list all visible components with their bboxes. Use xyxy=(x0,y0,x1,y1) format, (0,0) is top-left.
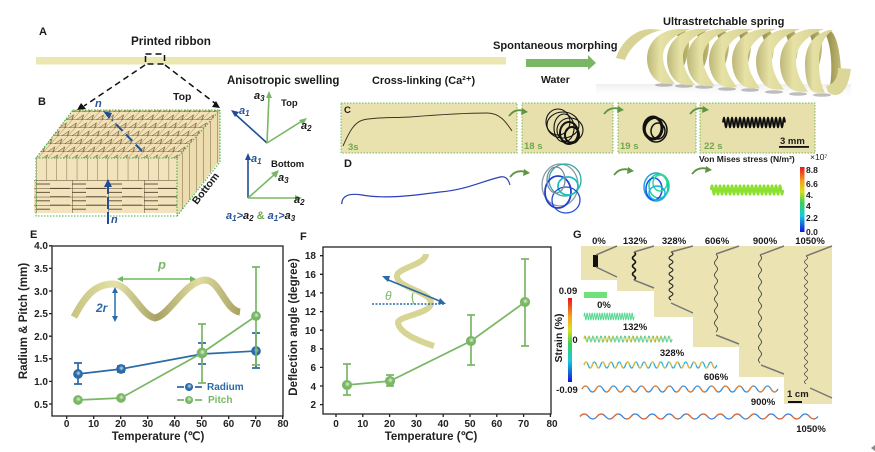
chart F x tick labels xyxy=(333,419,558,430)
strain colour bar: Strain (%) xyxy=(553,313,565,363)
scale bar: 1 cm: 1 cm xyxy=(787,389,809,400)
panel B: layered block diagram xyxy=(34,98,222,226)
chart E frame and ticks xyxy=(49,246,283,419)
printed ribbon strip xyxy=(36,57,506,64)
chart F y tick labels: 16 xyxy=(305,270,316,281)
strain colour bar: 0 xyxy=(572,335,578,346)
swelling axes, bottom xyxy=(245,153,305,207)
formula: a1 greater than a2 and a3: a xyxy=(226,210,232,222)
chart F frame and ticks xyxy=(320,247,551,417)
chart F x axis title: Temperature (℃) xyxy=(385,430,477,443)
strain colour bar xyxy=(553,286,578,396)
chart E x tick labels: 30 xyxy=(142,419,154,430)
chart E y tick labels: 3.0 xyxy=(34,287,48,298)
chart F y tick labels xyxy=(305,251,316,411)
colour bar: von Mises stress: 4. xyxy=(806,190,813,200)
swelling axes, top: a xyxy=(239,105,245,117)
photo 0% xyxy=(581,246,617,280)
colour bar: von Mises stress: 6.6 xyxy=(806,179,818,189)
spring at 1050% xyxy=(580,414,826,435)
illustration: ultrastretchable spring xyxy=(596,29,851,100)
chart F x tick labels: 10 xyxy=(357,419,369,430)
chart E x tick labels: 60 xyxy=(223,419,235,430)
panel label D: D xyxy=(344,158,352,170)
chart F x tick labels: 20 xyxy=(384,419,396,430)
chart E x tick labels: 20 xyxy=(115,419,127,430)
photo 328% xyxy=(654,246,693,317)
formula: a1 greater than a2 and a3: 1 xyxy=(274,214,279,223)
panel G: stretch photographs xyxy=(581,236,832,404)
chart E y tick labels: 1.0 xyxy=(34,377,48,388)
photo 1050% xyxy=(784,246,832,404)
formula: a1 greater than a2 and a3: a xyxy=(268,210,274,222)
spring at 900% xyxy=(582,386,778,408)
spring coils xyxy=(647,29,841,93)
deflection series xyxy=(343,259,529,395)
chart F y axis title: Deflection angle (degree) xyxy=(288,258,300,396)
label: cross-linking: Cross-linking (Ca²⁺) xyxy=(372,75,476,87)
photo 606% xyxy=(693,246,739,347)
formula: a1 greater than a2 and a3: 2 xyxy=(248,214,254,223)
spring at 606% xyxy=(584,362,729,383)
curved progress arrows, row C xyxy=(509,106,709,116)
strain colour bar: -0.09 xyxy=(556,385,578,396)
formula: a1 greater than a2 and a3: & xyxy=(254,210,268,222)
spring end tail xyxy=(826,68,851,95)
label n top: n xyxy=(95,98,102,110)
panel label E: E xyxy=(30,229,37,241)
legend xyxy=(177,382,244,406)
chart F y tick labels: 2 xyxy=(310,400,316,411)
chart E y tick labels: 1.5 xyxy=(34,354,48,365)
spring at 1050%: 1050% xyxy=(796,424,826,435)
stretch labels above photos: 132% xyxy=(623,236,648,247)
chart F: deflection angle vs temperature xyxy=(288,247,558,443)
helix illustration with p and 2r xyxy=(74,257,240,322)
spring at 132%: 132% xyxy=(623,322,648,333)
chart E: radius and pitch vs temperature xyxy=(18,241,289,443)
spring at 132% xyxy=(584,313,648,333)
stretch labels above photos: 900% xyxy=(753,236,778,247)
block top face xyxy=(36,110,220,158)
swelling axes, top: 2 xyxy=(306,124,312,133)
simulation: coiling 2 xyxy=(644,173,669,201)
arrow: water morphing xyxy=(526,55,596,70)
chart F y tick labels: 6 xyxy=(310,363,316,374)
label: von Mises stress: Von Mises stress (N/m²) xyxy=(699,154,795,164)
legend: Pitch xyxy=(208,395,232,406)
chart E x tick labels: 80 xyxy=(277,419,289,430)
colour bar: von Mises stress: 4 xyxy=(806,201,811,211)
chart F x tick labels: 50 xyxy=(464,419,476,430)
small corner marker xyxy=(871,445,875,451)
formula: a1 greater than a2 and a3: > xyxy=(278,210,285,222)
chart E y tick labels: 4.0 xyxy=(34,241,48,252)
block front lower layers xyxy=(34,180,177,213)
spring at 900%: 900% xyxy=(751,397,776,408)
heading: ultrastretchable spring: Ultrastretchable spring xyxy=(663,16,785,28)
stretch labels above photos: 1050% xyxy=(795,236,825,247)
formula: a1 greater than a2 and a3: 3 xyxy=(291,214,296,223)
swelling axes, top: 3 xyxy=(260,94,265,103)
panel label A: A xyxy=(39,26,47,38)
spring at 328% xyxy=(584,336,685,359)
chart E y tick labels xyxy=(34,241,48,411)
swelling axes, top: a xyxy=(254,90,260,102)
label n bottom: n xyxy=(111,214,118,226)
chart F y tick labels: 10 xyxy=(305,326,316,337)
normal vector, top xyxy=(103,111,142,151)
photo: 19 s coils: 19 s xyxy=(620,141,638,152)
photo 900% xyxy=(739,246,784,377)
chart F x tick labels: 40 xyxy=(438,419,449,430)
photo 132% xyxy=(617,246,654,291)
helix illustration with p and 2r: p xyxy=(157,257,166,272)
colour bar: von Mises stress: 0.0 xyxy=(806,227,818,237)
pitch series xyxy=(74,267,260,404)
chart F x tick labels: 70 xyxy=(518,419,530,430)
dashed zoom box with guide arrows xyxy=(77,54,220,110)
swelling axes, bottom: 3 xyxy=(284,176,289,185)
vertical helix with deflection angle: θ xyxy=(385,289,392,303)
colour bar: von Mises stress xyxy=(800,165,818,237)
heading: anisotropic swelling: Anisotropic swelling xyxy=(227,75,339,87)
colour bar: von Mises stress: 8.8 xyxy=(806,165,818,175)
swelling axes, top: a xyxy=(301,120,307,132)
photo: 22 s spring: 22 s xyxy=(704,141,722,152)
helix illustration with p and 2r: 2r xyxy=(95,301,109,315)
label: spontaneous morphing: Spontaneous morphing xyxy=(493,40,618,52)
chart F x tick labels: 0 xyxy=(333,419,339,430)
photo: 19 s coils xyxy=(618,103,696,153)
chart F y tick labels: 4 xyxy=(310,382,316,393)
spring floor shadow xyxy=(596,84,851,100)
swelling axes, bottom: 2 xyxy=(299,198,305,207)
chart E y axis title: Radium & Pitch (mm) xyxy=(18,263,30,379)
chart E y tick labels: 0.5 xyxy=(34,400,48,411)
simulated strain springs xyxy=(580,292,826,435)
formula: a1 greater than a2 and a3: a xyxy=(285,210,291,222)
curved progress arrows, row D xyxy=(510,166,712,177)
block front upper layer xyxy=(36,158,177,180)
label: multiplier: ×10⁷ xyxy=(810,152,828,162)
swelling axes, bottom: a xyxy=(294,194,300,206)
swelling axes, bottom: a xyxy=(251,153,257,165)
chart E x tick labels: 50 xyxy=(196,419,208,430)
formula: a1 greater than a2 and a3: a xyxy=(243,210,249,222)
spring contact shadows xyxy=(655,83,831,97)
chart F y tick labels: 12 xyxy=(305,307,316,318)
block side face xyxy=(177,110,220,216)
panel label F: F xyxy=(300,231,307,243)
spring at 328%: 328% xyxy=(660,348,685,359)
panel label G: G xyxy=(573,229,582,241)
swelling axes, top: 1 xyxy=(245,109,250,118)
simulation: coiling 1 xyxy=(542,164,581,213)
chart F x tick labels: 60 xyxy=(491,419,503,430)
spring start tail xyxy=(616,29,662,60)
formula: a1 greater than a2 and a3: > xyxy=(237,210,244,222)
label: top: Top xyxy=(173,91,191,103)
swelling axes, bottom: 1 xyxy=(257,157,262,166)
scale bar: 3 mm: 3 mm xyxy=(780,136,805,147)
chart E x tick labels: 40 xyxy=(169,419,181,430)
panel label B: B xyxy=(38,96,46,108)
radium series xyxy=(74,333,260,384)
chart E x tick labels: 0 xyxy=(64,419,70,430)
chart F y tick labels: 18 xyxy=(305,251,316,262)
photo: 22 s spring xyxy=(700,103,815,153)
photo: 18 s coils: 18 s xyxy=(524,141,542,152)
chart F y tick labels: 8 xyxy=(310,344,316,355)
photo: 18 s coils xyxy=(522,103,613,153)
simulation: flat ribbon xyxy=(342,177,510,204)
swelling axes, bottom: Bottom xyxy=(271,159,304,170)
swelling axes, top: Top xyxy=(281,98,298,109)
chart E y tick labels: 2.0 xyxy=(34,332,48,343)
label bottom rotated: Bottom xyxy=(190,170,222,207)
chart E x tick labels: 10 xyxy=(88,419,100,430)
photo: 3 s ribbon xyxy=(341,103,517,153)
spring at 606%: 606% xyxy=(704,372,729,383)
heading: printed ribbon: Printed ribbon xyxy=(131,35,211,48)
spring at 0%: 0% xyxy=(597,300,611,311)
chart E axis titles: Temperature (℃) xyxy=(112,430,204,443)
dotted green outline xyxy=(36,110,220,216)
stretch labels above photos: 328% xyxy=(662,236,687,247)
vertical helix with deflection angle xyxy=(372,254,446,346)
swelling axes, top xyxy=(231,90,312,143)
chart F x tick labels: 80 xyxy=(546,419,558,430)
chart E x tick labels: 70 xyxy=(250,419,262,430)
colour bar: von Mises stress: 2.2 xyxy=(806,213,818,223)
simulation: final spring xyxy=(711,186,783,194)
chart E y tick labels: 2.5 xyxy=(34,309,48,320)
normal vector, front xyxy=(104,179,112,224)
spring at 0% xyxy=(584,292,611,311)
swelling axes, bottom: a xyxy=(278,172,284,184)
chart E y tick labels: 3.5 xyxy=(34,264,48,275)
photo: 3 s ribbon: C xyxy=(344,105,351,116)
formula: a1 greater than a2 and a3: 1 xyxy=(232,214,237,223)
panel C: time-lapse photographs xyxy=(341,103,815,153)
stretch labels above photos: 0% xyxy=(592,236,606,247)
label: water: Water xyxy=(541,74,570,86)
chart F x tick labels: 30 xyxy=(411,419,422,430)
stretch labels above photos xyxy=(592,236,825,247)
photo: 3 s ribbon: 3s xyxy=(348,142,359,153)
stretch labels above photos: 606% xyxy=(705,236,730,247)
chart E x tick labels xyxy=(64,419,289,430)
legend: Radium xyxy=(207,382,244,393)
strain colour bar: 0.09 xyxy=(559,286,577,297)
chart F y tick labels: 14 xyxy=(305,289,316,300)
